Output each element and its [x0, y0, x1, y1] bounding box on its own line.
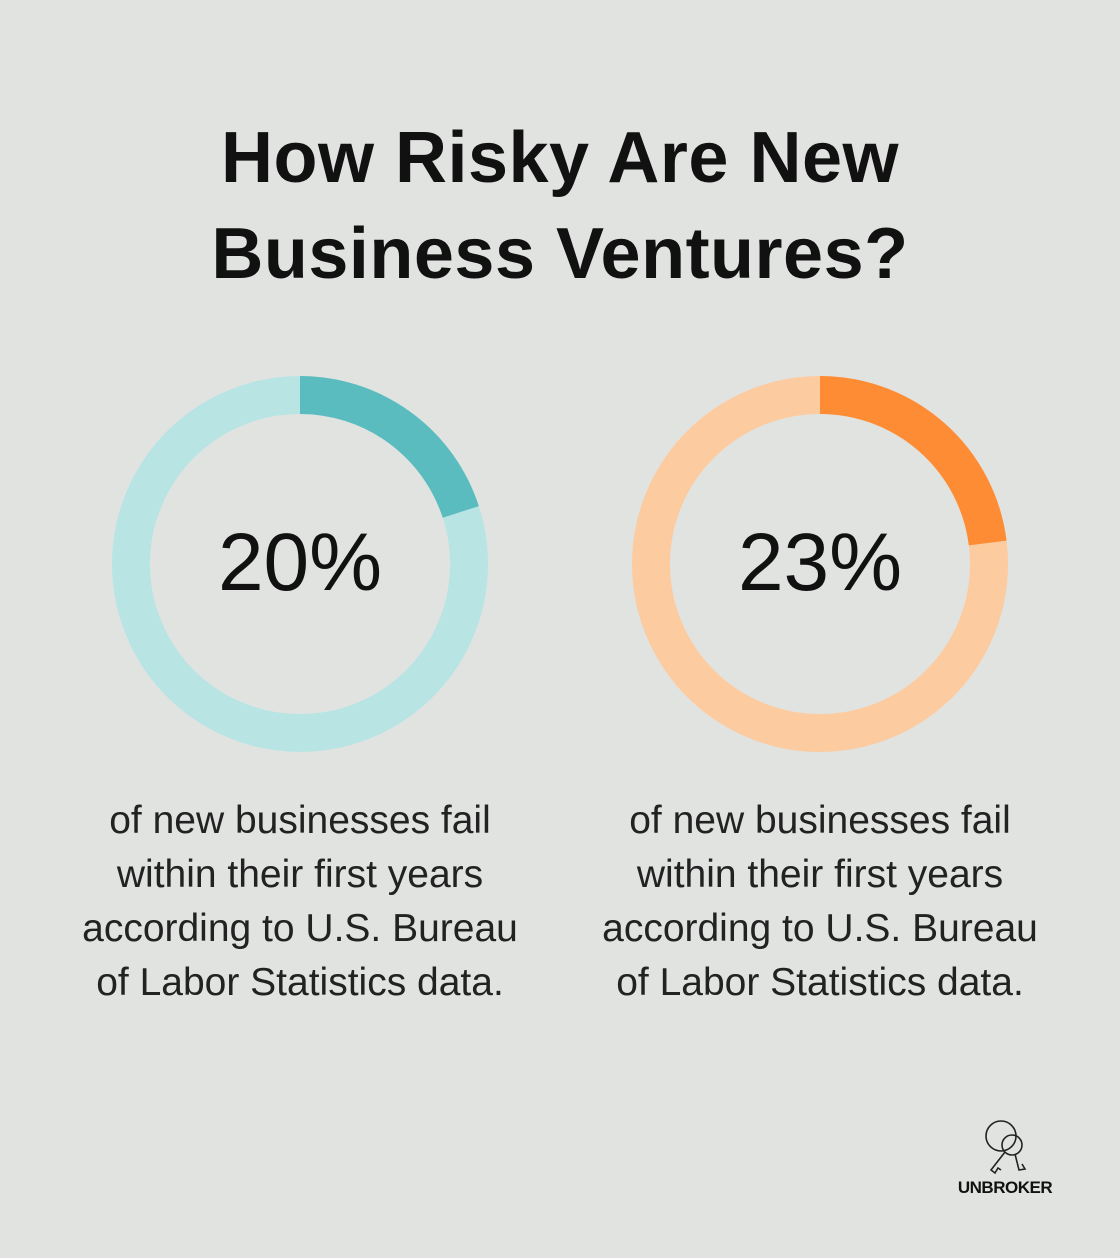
title	[211, 118, 909, 294]
text: left description	[82, 799, 518, 1004]
text: left description: of new businesses fail	[109, 799, 491, 842]
text: right description: of new businesses fail	[629, 799, 1011, 842]
donut chart: 23%: 23%	[738, 517, 902, 608]
text: left description: according to U.S. Bureau	[82, 907, 518, 950]
donut chart: 23%	[632, 376, 1008, 752]
text: right description: of Labor Statistics data.	[616, 961, 1024, 1004]
text: right description	[602, 799, 1038, 1004]
title: How Risky Are New	[221, 118, 899, 198]
logo: unbroker	[958, 1120, 1052, 1197]
text: right description: within their first years	[637, 853, 1003, 896]
text: right description: according to U.S. Bureau	[602, 907, 1038, 950]
donut chart: 20%: 20%	[218, 517, 382, 608]
text: left description: within their first years	[117, 853, 483, 896]
logo: unbroker: UNBROKER	[958, 1178, 1052, 1197]
text: left description: of Labor Statistics data.	[96, 961, 504, 1004]
donut chart: 20%	[112, 376, 488, 752]
title: Business Ventures?	[211, 214, 909, 294]
